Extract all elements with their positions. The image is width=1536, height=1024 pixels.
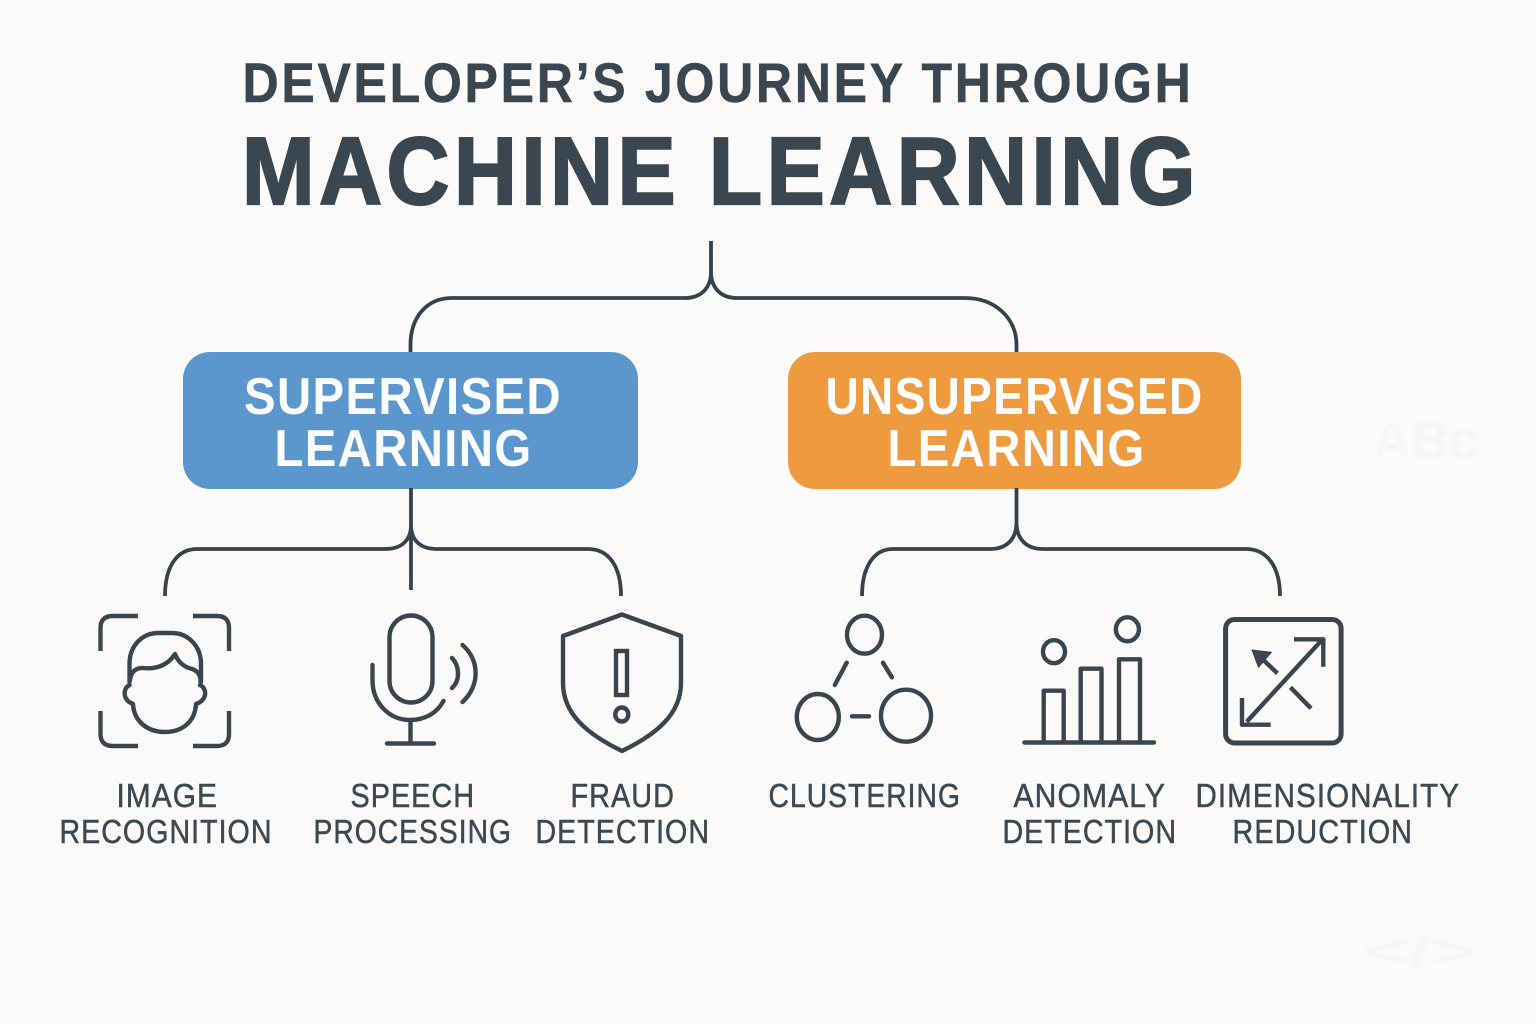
icon: image recognition [100, 616, 229, 746]
text: </> [1362, 927, 1477, 976]
label: clustering: CLUSTERING [768, 777, 961, 814]
connector: title to categories [410, 241, 1016, 353]
icon: anomaly bar chart [1024, 617, 1154, 742]
title [242, 51, 1200, 225]
label: anomaly detection: DETECTION [1002, 813, 1177, 850]
label: fraud detection: DETECTION [536, 813, 710, 850]
unsupervised heading: UNSUPERVISED [826, 368, 1204, 426]
label: dimensionality reduction: REDUCTION [1232, 813, 1413, 850]
label: speech processing: SPEECH [350, 777, 475, 814]
title line 1: DEVELOPER’S JOURNEY THROUGH [242, 51, 1194, 114]
text: ABc [1373, 412, 1478, 470]
supervised heading: SUPERVISED [244, 368, 562, 426]
connector: supervised to children [165, 488, 621, 596]
icon: dimensionality reduction [1226, 620, 1341, 743]
label: dimensionality reduction: DIMENSIONALITY [1196, 777, 1460, 814]
icon: clusters [797, 616, 931, 742]
label: image recognition: RECOGNITION [60, 813, 272, 850]
unsupervised heading: LEARNING [888, 420, 1146, 478]
title line 2: MACHINE LEARNING [242, 118, 1200, 225]
panel: unsupervised learning [788, 352, 1241, 489]
panel: supervised learning [183, 352, 638, 489]
connector: unsupervised to children [862, 488, 1280, 596]
label: anomaly detection: ANOMALY [1014, 777, 1166, 814]
label: image recognition: IMAGE [116, 777, 218, 814]
label: fraud detection: FRAUD [570, 777, 675, 814]
icon: shield with exclamation [563, 614, 681, 751]
label: speech processing: PROCESSING [314, 813, 512, 850]
icon: microphone [372, 616, 476, 744]
supervised heading: LEARNING [274, 420, 532, 478]
